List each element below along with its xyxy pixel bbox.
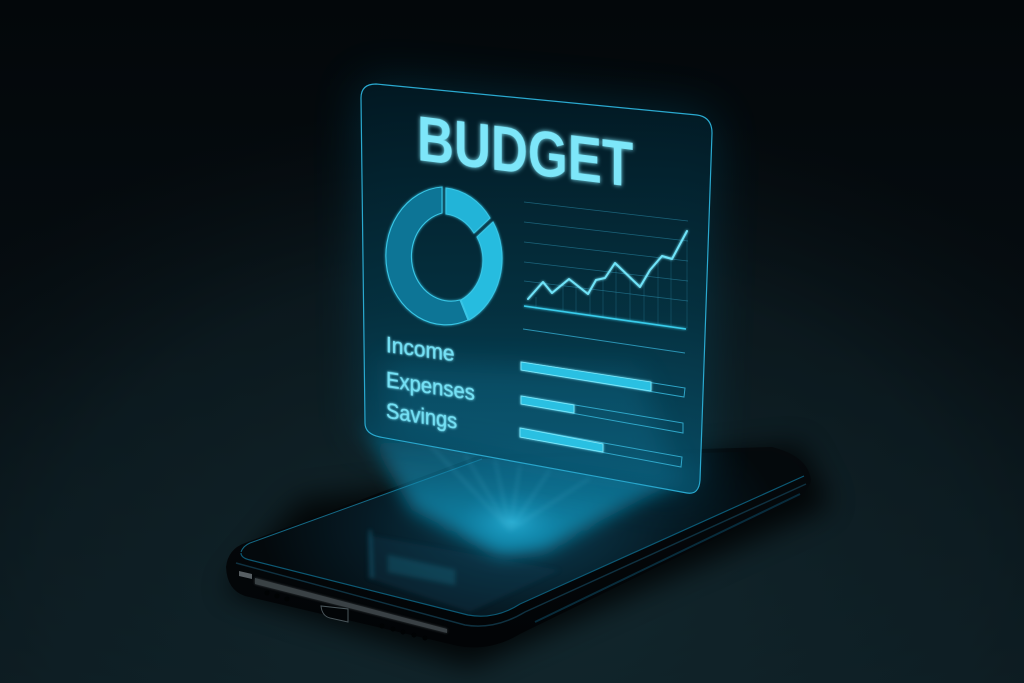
heading: BUDGET: BUDGET — [417, 103, 633, 201]
donut segment: large — [386, 187, 468, 325]
donut segment: right — [461, 222, 502, 320]
phone body — [226, 447, 811, 648]
screen reflection of panel — [368, 530, 560, 612]
progress bar: income — [521, 362, 685, 397]
progress bar: expenses — [521, 396, 683, 433]
legend label: Expenses: Expenses — [386, 367, 475, 406]
divider — [523, 329, 685, 353]
beam seen through panel — [385, 360, 680, 488]
panel: budget hologram — [361, 84, 712, 493]
phone shadow — [225, 445, 830, 668]
charging port — [321, 606, 348, 622]
screen and frame rim lines — [236, 459, 806, 626]
hologram light beam — [362, 425, 700, 556]
legend label: Savings: Savings — [386, 399, 457, 434]
phone side strip — [239, 571, 447, 633]
donut chart — [386, 187, 502, 325]
speaker holes left — [264, 590, 290, 602]
chart grid — [524, 202, 688, 301]
phone screen — [241, 451, 804, 616]
donut segment: top — [446, 188, 490, 233]
chart baseline — [524, 306, 686, 329]
progress bar: savings — [520, 428, 682, 467]
panel glow — [361, 84, 712, 493]
light rays — [430, 445, 590, 530]
phone — [225, 445, 830, 668]
line chart — [523, 202, 688, 353]
speaker holes right — [380, 624, 428, 640]
panel background — [361, 84, 712, 493]
chart trend line — [528, 231, 687, 299]
legend label: Income: Income — [386, 332, 455, 366]
